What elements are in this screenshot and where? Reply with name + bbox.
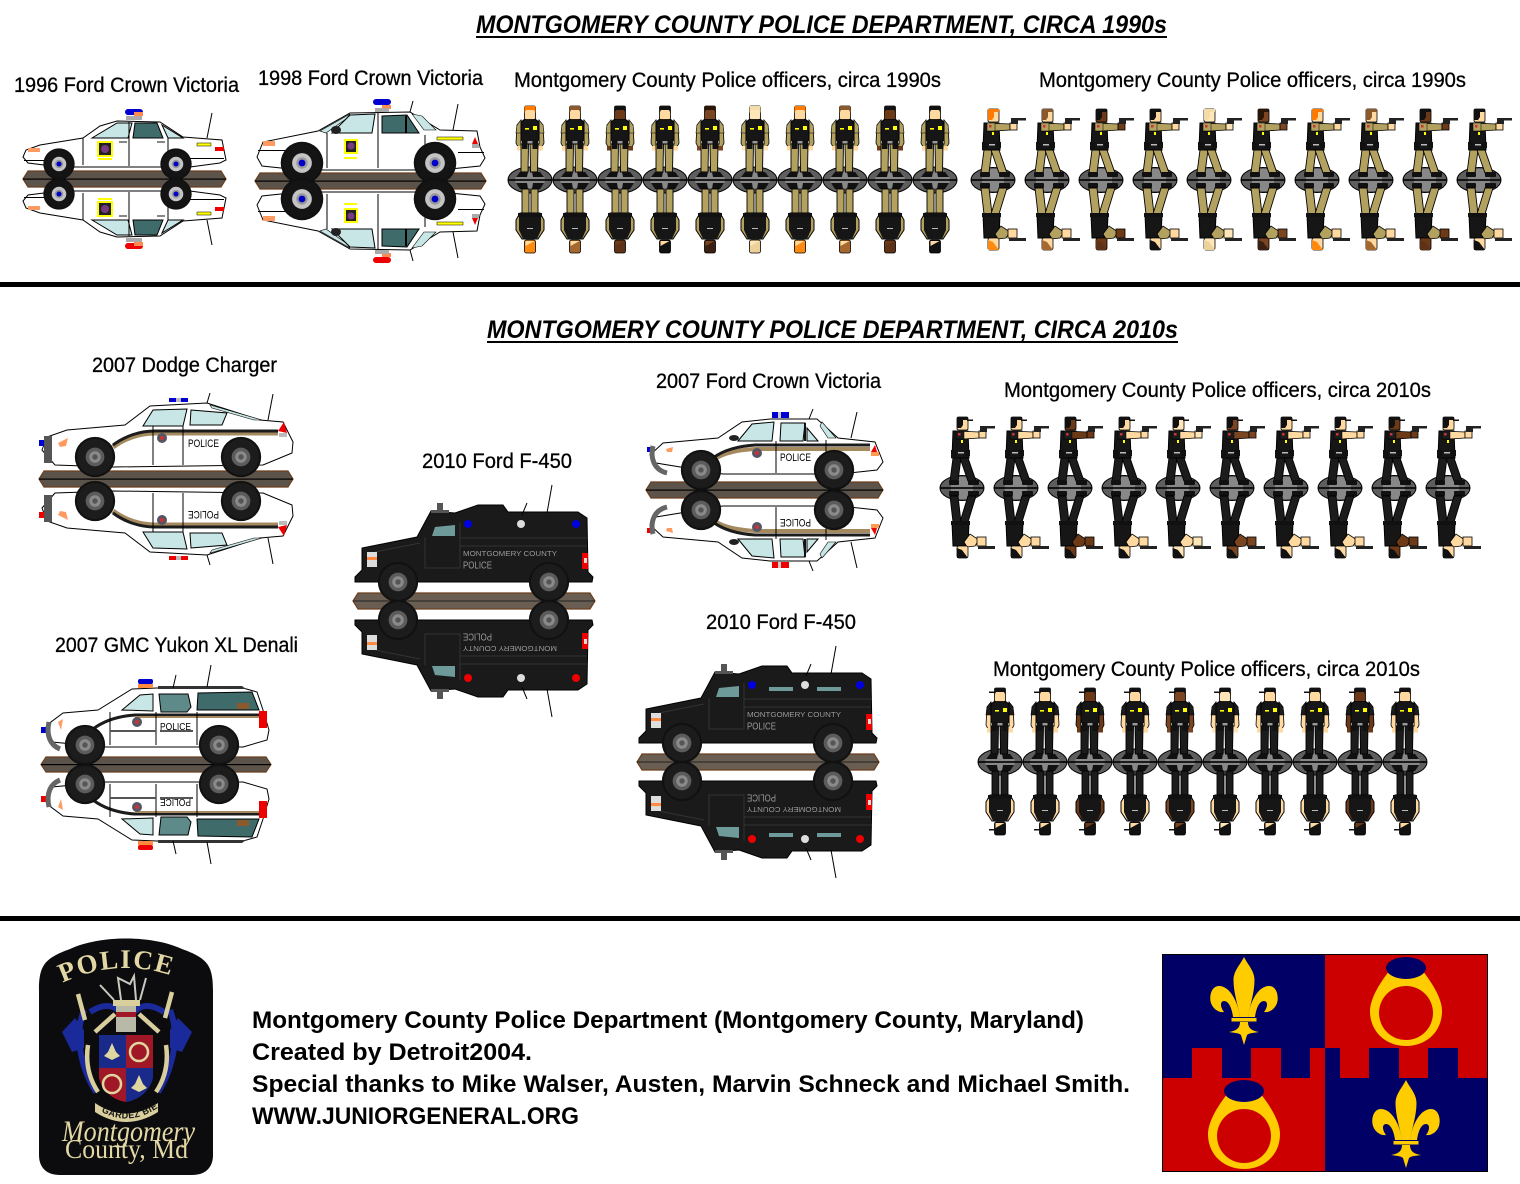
badge: Montgomery County police patch [38, 938, 213, 1175]
badge: Montgomery County police patch: Montgomery [61, 1115, 196, 1148]
label: 2007 GMC Yukon XL Denali: 2007 GMC Yukon XL Denali [55, 634, 298, 657]
badge: Montgomery County police patch: POLICE [56, 950, 173, 982]
figures: aiming officers 1990s [971, 109, 1512, 250]
vehicle: 2010 Ford F-450 left: MONTGOMERY COUNTY [463, 549, 557, 558]
vehicle: 1998 Ford Crown Victoria [255, 99, 486, 263]
vehicle: 2010 Ford F-450 left: MONTGOMERY COUNTY [463, 644, 557, 653]
credits text block [252, 1007, 1130, 1130]
badge: Montgomery County police patch: GARDEZ BIEN [102, 1105, 158, 1118]
label: officers front 2010s: Montgomery County Police officers, circa 2010s [993, 658, 1420, 681]
title: 2010s section: MONTGOMERY COUNTY POLICE DEPARTMENT, CIRCA 2010s [487, 316, 1178, 344]
credits text block: Montgomery County Police Department (Montgomery County, Maryland) [252, 1007, 1084, 1034]
vehicle: 2010 Ford F-450 right: POLICE [747, 722, 776, 732]
badge: Montgomery County police patch: County, Md [65, 1134, 188, 1164]
label: 1998 Ford Crown Victoria: 1998 Ford Crown Victoria [258, 67, 483, 90]
vehicle: 2010 Ford F-450 left: POLICE [463, 560, 492, 572]
vehicle: 2010 Ford F-450 right: POLICE [747, 792, 776, 802]
label: officers aiming 1990s: Montgomery County Police officers, circa 1990s [1039, 69, 1466, 92]
label: 1996 Ford Crown Victoria: 1996 Ford Crown Victoria [14, 74, 239, 97]
label: 2007 Ford Crown Victoria: 2007 Ford Crown Victoria [656, 370, 881, 393]
vehicle: 1996 Ford Crown Victoria [23, 109, 226, 249]
vehicle: 2007 GMC Yukon XL Denali: POLICE [160, 721, 191, 733]
vehicle: 2007 Dodge Charger: POLICE [188, 508, 219, 520]
label: 2007 Dodge Charger: 2007 Dodge Charger [92, 354, 277, 377]
vehicle: 2007 Ford Crown Victoria: POLICE [780, 452, 811, 464]
vehicle: 2007 Dodge Charger [39, 393, 293, 565]
vehicle: 2007 GMC Yukon XL Denali [41, 665, 271, 864]
label: 2010 Ford F-450 right: 2010 Ford F-450 [706, 611, 856, 634]
vehicle: 2007 Ford Crown Victoria: POLICE [780, 516, 811, 528]
label: officers front 1990s: Montgomery County Police officers, circa 1990s [514, 69, 941, 92]
vehicle: 2010 Ford F-450 left: POLICE [463, 630, 492, 642]
vehicle: 2007 Dodge Charger: POLICE [188, 438, 219, 450]
vehicle: 2010 Ford F-450 right: MONTGOMERY COUNTY [747, 710, 841, 719]
credits text block: WWW.JUNIORGENERAL.ORG [252, 1103, 579, 1130]
figures: aiming officers 2010s [940, 417, 1481, 558]
vehicle: 2007 Ford Crown Victoria [646, 409, 883, 571]
credits text block: Created by Detroit2004. [252, 1039, 532, 1066]
label: 2010 Ford F-450 left: 2010 Ford F-450 [422, 450, 572, 473]
vehicle: 2007 GMC Yukon XL Denali: POLICE [160, 796, 191, 808]
title: 1990s section: MONTGOMERY COUNTY POLICE DEPARTMENT, CIRCA 1990s [476, 11, 1167, 39]
credits text block: Special thanks to Mike Walser, Austen, Marvin Schneck and Michael Smith. [252, 1071, 1130, 1098]
vehicle: 2010 Ford F-450 right: MONTGOMERY COUNTY [747, 805, 841, 814]
flag of Montgomery County [1162, 954, 1488, 1172]
label: officers aiming 2010s: Montgomery County Police officers, circa 2010s [1004, 379, 1431, 402]
vehicle: 2010 Ford F-450 left [353, 485, 595, 717]
figures: standing officers 1990s [508, 106, 957, 253]
figures: standing officers 2010s [978, 688, 1427, 835]
vehicle: 2010 Ford F-450 right [637, 646, 879, 878]
